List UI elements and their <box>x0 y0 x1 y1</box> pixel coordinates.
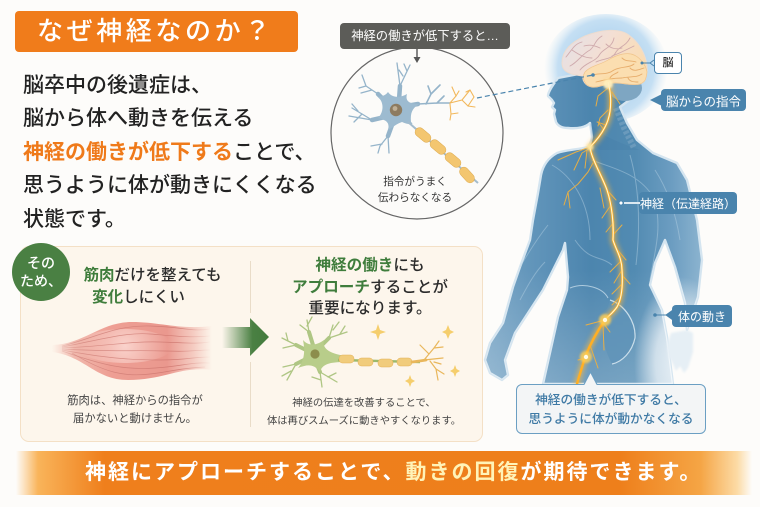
illustration: human body with nerve pathway <box>484 14 704 384</box>
circle caption <box>378 176 452 204</box>
label: 神経（伝達経路）: 神経（伝達経路） <box>640 196 736 210</box>
bottom banner: 神経にアプローチすることで、動きの回復が期待できます。 <box>85 461 702 484</box>
caption: nerve: 神経の伝達を改善することで、 <box>292 398 436 409</box>
panel background <box>20 246 483 442</box>
brain <box>562 30 647 101</box>
intro text block <box>23 74 317 231</box>
head glow <box>544 14 668 122</box>
label: 脳からの指令 <box>661 89 746 111</box>
intro text block: 脳卒中の後遺症は、 <box>23 74 212 97</box>
caption: nerve <box>267 397 461 427</box>
intro text block: 脳から体へ動きを伝える <box>23 107 253 130</box>
arrow <box>224 318 269 356</box>
callout: 思うように体が動かなくなる <box>529 412 693 426</box>
callout <box>516 384 706 434</box>
heading: nerve <box>292 256 448 317</box>
divider top <box>250 261 251 313</box>
label: 脳 <box>654 52 682 74</box>
caption: muscle: 筋肉は、神経からの指令が <box>67 395 203 407</box>
illustration: healthy neuron <box>281 316 460 388</box>
label: 神経の働きが低下すると…: 神経の働きが低下すると… <box>351 29 499 43</box>
heading: muscle: 変化しにくい <box>92 289 185 306</box>
bottom banner <box>16 451 752 495</box>
label: 体の動き: 体の動き <box>678 310 726 324</box>
heading: muscle: 筋肉だけを整えても <box>84 267 221 284</box>
heading: nerve: 重要になります。 <box>308 300 432 317</box>
nerve glow points <box>580 79 613 363</box>
intro text block: 神経の働きが低下することで、 <box>23 141 316 164</box>
label: 体の動き <box>672 305 732 327</box>
callout: 神経の働きが低下すると、 <box>535 393 687 407</box>
dashed connector <box>477 75 593 98</box>
heading: nerve: アプローチすることが <box>292 279 448 296</box>
title banner: なぜ神経なのか？ <box>37 16 274 46</box>
panel: why nerves matter <box>12 243 483 442</box>
nerve pathway <box>558 82 630 384</box>
heading: muscle <box>84 266 221 306</box>
label: 神経（伝達経路） <box>639 192 737 214</box>
intro text block: 状態です。 <box>23 208 126 231</box>
circle caption: 指令がうまく <box>383 176 447 188</box>
caption: muscle <box>67 394 203 425</box>
illustration: muscle <box>55 322 210 380</box>
intro text block: 思うように体が動きにくくなる <box>23 174 317 197</box>
heading: nerve: 神経の働きにも <box>315 257 425 274</box>
label: 脳からの指令: 脳からの指令 <box>666 94 741 108</box>
badge: そのため <box>12 243 70 301</box>
caption: nerve: 体は再びスムーズに動きやすくなります。 <box>267 416 461 427</box>
badge: そのため: ため、 <box>20 273 62 289</box>
label: 神経の働きが低下すると… <box>340 23 510 49</box>
label: 脳: 脳 <box>662 57 674 69</box>
body silhouette <box>484 74 704 384</box>
circle caption: 伝わらなくなる <box>378 192 452 204</box>
caption: muscle: 届かないと動けません。 <box>73 413 197 425</box>
neuron <box>349 63 478 185</box>
title banner <box>15 11 298 52</box>
badge: そのため: その <box>27 255 55 271</box>
icon: down arrow <box>414 49 420 63</box>
divider bottom <box>250 362 251 427</box>
